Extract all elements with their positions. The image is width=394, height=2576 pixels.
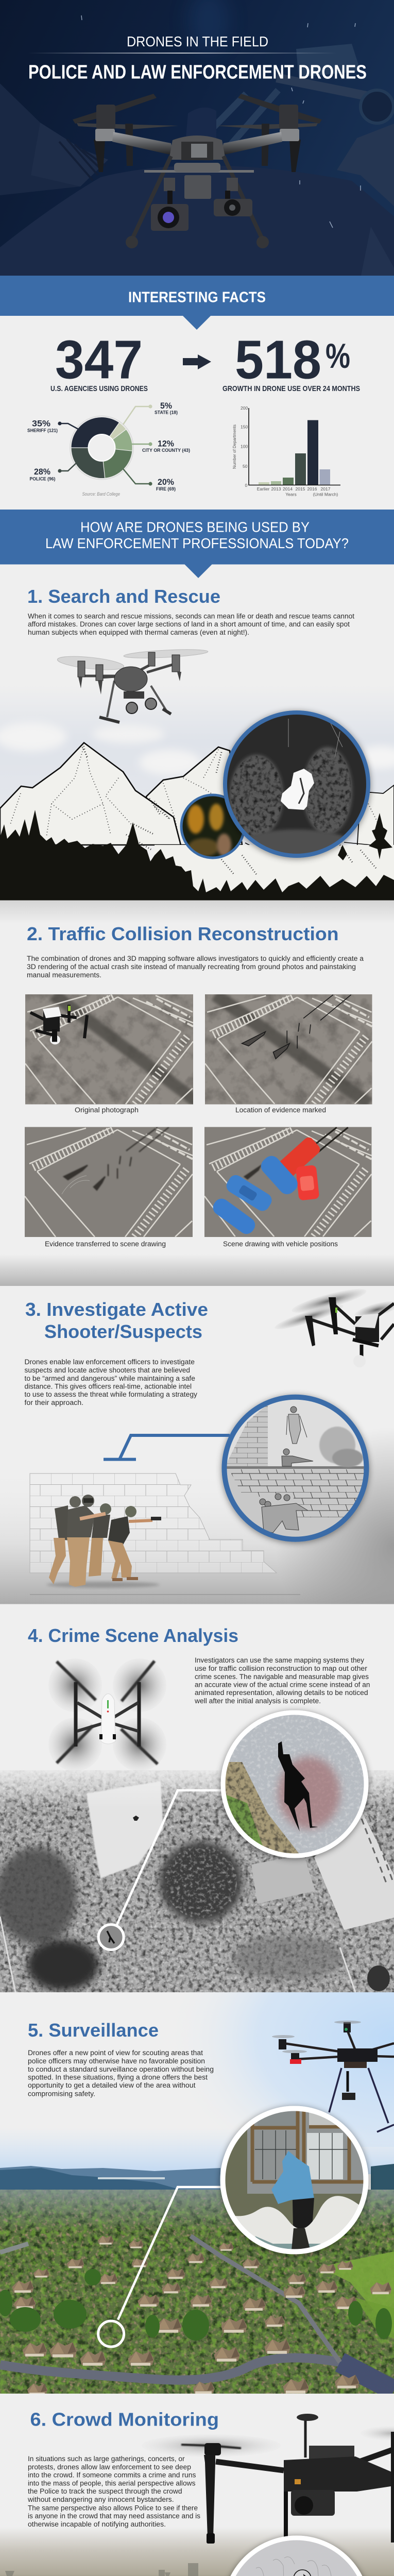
- body text: spotted. In these situations, flying a drone offers the best: [28, 2073, 208, 2081]
- heading: 5. Surveillance: [28, 2020, 159, 2041]
- label: city or county: 12%: [158, 439, 174, 448]
- arrow: [183, 354, 211, 369]
- stat: 518% growth: GROWTH IN DRONE USE OVER 24 MONTHS: [222, 384, 360, 393]
- sketch figures: [260, 1406, 313, 1533]
- stat: 347 agencies: 347: [55, 330, 143, 391]
- panel: 2 traffic collision reconstruction: [0, 901, 394, 1286]
- panel: 5 surveillance: [0, 1992, 394, 2395]
- body text: to conduct a standard surveillance operation without being: [28, 2065, 214, 2073]
- heading: 6. Crowd Monitoring: [30, 2409, 219, 2430]
- bar chart: Number of Departments: [232, 425, 237, 469]
- sky: [0, 685, 394, 845]
- body text: is anyone in the crowd that may need assistance and is: [28, 2512, 200, 2520]
- label: police: 28%: [34, 467, 50, 477]
- bar chart: 2016: [307, 486, 317, 492]
- circle: rooftop sketch: [225, 1397, 369, 1541]
- heading: [25, 1299, 208, 1342]
- circle: suspect sketch: [225, 2538, 368, 2576]
- bar chart: 2017: [321, 486, 331, 492]
- soldier front with pistol: [108, 1506, 161, 1580]
- body text: without endangering any innocent bystanders.: [27, 2496, 174, 2503]
- panel: hero: [0, 0, 394, 278]
- bar chart: 0: [245, 483, 247, 488]
- label: state: STATE (18): [155, 410, 178, 415]
- residential aerial photo: [0, 2164, 394, 2395]
- bar chart: (Until March): [313, 492, 338, 497]
- circle: thermal view: [225, 713, 368, 860]
- body text: In situations such as large gatherings, concerts, or: [28, 2455, 185, 2463]
- rooftops: [12, 2235, 392, 2395]
- body text: [28, 2049, 214, 2098]
- drone in photo: [30, 1005, 87, 1044]
- body text: distance. This gives officers real-time, actionable intel: [25, 1383, 192, 1390]
- label: police: [30, 463, 77, 481]
- body text: [194, 1656, 370, 1705]
- body text: When it comes to search and rescue missions, seconds can mean life or death and rescue teams cannot: [28, 612, 354, 620]
- panel: 1 search and rescue: [0, 586, 394, 901]
- panel: how are drones used header: LAW ENFORCEMENT PROFESSIONALS TODAY?: [45, 535, 349, 551]
- body text: crime scenes. The navigable and measurable map gives: [195, 1673, 369, 1681]
- body text: Drones enable law enforcement officers to investigate: [25, 1358, 195, 1366]
- caption: Evidence transferred to scene drawing: [45, 1240, 166, 1248]
- drone: hexacopter: [272, 2021, 394, 2132]
- heading: 1. Search and Rescue: [27, 586, 220, 607]
- aerial photo: [0, 1765, 394, 1992]
- bar chart: Earlier: [257, 486, 269, 492]
- donut chart: [27, 401, 190, 497]
- stat: 347 agencies: U.S. AGENCIES USING DRONES: [50, 384, 148, 393]
- body text: [25, 1358, 197, 1406]
- body text: into the mass of people, this aerial perspective allows: [28, 2479, 196, 2487]
- soldier rear: [49, 1496, 81, 1584]
- drawing: vehicle positions: [204, 1127, 372, 1237]
- panel: how are drones used header: HOW ARE DRONES BEING USED BY: [80, 519, 310, 535]
- bar chart: 2015: [296, 486, 305, 492]
- hero drone: [73, 94, 322, 248]
- heading: 2. Traffic Collision Reconstruction: [27, 923, 339, 944]
- label: state: 5%: [160, 401, 172, 411]
- label: fire: 20%: [158, 478, 174, 487]
- panel: 4 crime scene analysis: [0, 1604, 394, 1992]
- crowd photo: [0, 2527, 394, 2576]
- circle: forest photo: [181, 795, 244, 858]
- body text: to use to assess the threat while formulating a strategy: [25, 1391, 197, 1398]
- callout connector: [118, 2187, 221, 2319]
- photo: original photograph: [25, 994, 200, 1105]
- label: sheriff: SHERIFF (121): [27, 428, 58, 433]
- label: police: POLICE (96): [30, 476, 56, 481]
- body text: an accurate view of the actual crime scene instead of an: [195, 1681, 370, 1689]
- body text: for their approach.: [25, 1399, 83, 1406]
- body text: Investigators can use the same mapping systems they: [195, 1656, 364, 1664]
- body text: Drones offer a new point of view for scouting areas that: [28, 2049, 203, 2057]
- body text: afford mistakes. Drones can cover large sections of land in a short amount of time, and can easily spot: [28, 620, 350, 628]
- body text: opportunity to get a detailed view of the area without: [28, 2081, 196, 2089]
- label: sheriff: 35%: [32, 419, 50, 429]
- body text: animated representation, allowing details to be noticed: [195, 1689, 368, 1697]
- body text: The combination of drones and 3D mapping software allows investigators to quickly and efficiently create a: [27, 955, 364, 962]
- label: fire: FIRE (69): [156, 486, 176, 492]
- bar chart: 200: [241, 405, 248, 411]
- body text: to be “armed and dangerous” while maintaining a safe: [25, 1375, 195, 1382]
- body text: [27, 955, 364, 979]
- bar chart: 50: [243, 464, 248, 469]
- tree clumps: [0, 2269, 392, 2341]
- panel: interesting facts header: [0, 276, 394, 330]
- heading: drones in the field: DRONES IN THE FIELD: [127, 33, 268, 49]
- label: state: [123, 401, 178, 425]
- red cars: [276, 1136, 322, 1200]
- brick wall: [30, 1473, 277, 1573]
- soldier third: [89, 1503, 111, 1577]
- body text: otherwise incapable of notifying authorities.: [28, 2520, 166, 2528]
- main suspect figure: [278, 2570, 326, 2576]
- body text: police officers may otherwise have no favorable position: [28, 2057, 205, 2065]
- panel: 6 crowd monitoring: [0, 2394, 394, 2576]
- treeline silhouette: [0, 810, 394, 901]
- body text: The same perspective also allows Police to see if there: [28, 2504, 198, 2512]
- caption: Original photograph: [75, 1106, 139, 1114]
- heading: Shooter/Suspects: [44, 1321, 202, 1342]
- panel: interesting facts header: INTERESTING FACTS: [128, 290, 266, 306]
- body text: well after the initial analysis is complete.: [194, 1697, 321, 1705]
- caption: Scene drawing with vehicle positions: [223, 1240, 338, 1248]
- drawing: evidence transferred: [25, 1127, 193, 1237]
- body text: into the crowd. If someone commits a crime and runs: [28, 2471, 196, 2479]
- label: city or county: [132, 439, 190, 453]
- body text: the Police to track the suspect through the crowd: [28, 2487, 182, 2495]
- body text: [27, 2455, 200, 2528]
- panel: 3 investigate active shooter: [0, 1284, 394, 1604]
- source note: Source: Bard College: [82, 492, 120, 497]
- bar chart: 2013: [271, 486, 281, 492]
- bar chart: 150: [241, 425, 248, 430]
- body text: manual measurements.: [27, 971, 101, 979]
- body text: suspects and locate active shooters that are believed: [25, 1366, 190, 1374]
- photo: evidence marked: [205, 994, 372, 1105]
- small marker circle: [98, 1925, 124, 1950]
- label: city or county: CITY OR COUNTY (43): [142, 448, 190, 453]
- bystander outlines: [256, 2557, 333, 2576]
- soldiers: [46, 1495, 161, 1588]
- body text: protests, drones allow law enforcement to see deep: [28, 2463, 191, 2471]
- bar chart: 100: [241, 444, 248, 449]
- heading: 3. Investigate Active: [25, 1299, 208, 1320]
- mountains: [0, 743, 394, 894]
- lawn and roads: [0, 2236, 394, 2391]
- small marker circle: [98, 2321, 124, 2347]
- callout connector: [104, 1435, 230, 1460]
- blue cars: [210, 1153, 301, 1237]
- body text: [28, 612, 354, 636]
- soldier second: [67, 1495, 106, 1587]
- body text: 3D rendering of the actual crash site instead of manually recreating from ground photos and painstaking: [27, 963, 356, 971]
- drone: inspire in flight: [273, 1284, 394, 1367]
- circle: zoomed subject: [221, 1710, 371, 1860]
- label: fire: [123, 469, 176, 492]
- stat: 518% growth: [222, 330, 360, 393]
- drone: matrice close-up: [142, 2414, 394, 2544]
- drone sketch: [57, 648, 208, 722]
- hero background machinery: [0, 0, 394, 278]
- body text: use for traffic collision reconstruction to map out other: [195, 1665, 368, 1672]
- heading: 4. Crime Scene Analysis: [28, 1625, 238, 1646]
- stat: 518% growth: 518: [235, 330, 321, 391]
- body text: compromising safety.: [28, 2090, 95, 2098]
- bar chart: Years: [285, 492, 297, 497]
- label: sheriff: [27, 419, 78, 433]
- panel: how are drones used header: [0, 510, 394, 578]
- drone: top view: [48, 1658, 166, 1771]
- caption: Location of evidence marked: [235, 1106, 326, 1114]
- callout connector: [117, 1790, 221, 1925]
- bar chart: 2014: [283, 486, 293, 492]
- pine trees right: [338, 813, 392, 860]
- bar chart: [232, 405, 340, 497]
- body text: human subjects when equipped with thermal cameras (even at night!).: [28, 629, 249, 636]
- circle: suspect at window: [221, 2106, 371, 2257]
- stat: 518% growth: %: [326, 336, 350, 376]
